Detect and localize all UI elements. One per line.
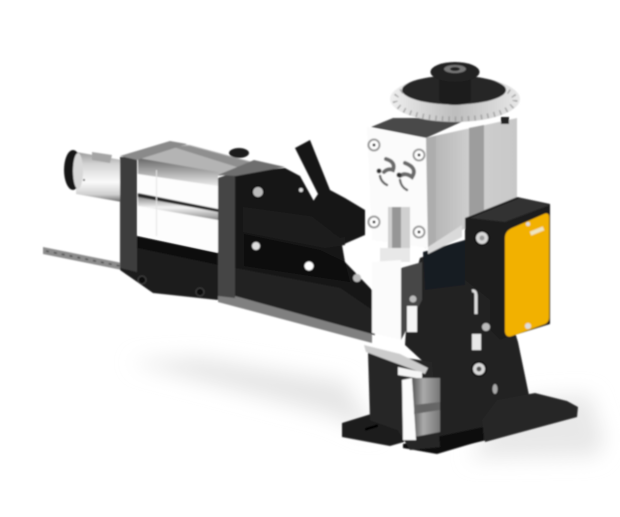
main black slide body: [218, 168, 375, 343]
second end plate: [218, 172, 235, 298]
slot and pins: [407, 291, 490, 350]
top plate: [371, 118, 470, 138]
crimp body black: [405, 225, 529, 452]
base plate: [342, 393, 578, 454]
bolts: [251, 186, 361, 282]
wire strip: [43, 247, 122, 270]
cylinder body: [136, 143, 253, 252]
yellow label plate: [505, 213, 549, 336]
white front face: [367, 127, 428, 248]
front end plate: [120, 157, 137, 272]
knob behind body: [229, 148, 249, 158]
white ram block: [372, 260, 422, 340]
lower frame and anvil: [364, 345, 440, 450]
lower slide block: [120, 236, 218, 300]
angled air fitting: [295, 140, 365, 238]
dial knob: [430, 62, 480, 105]
bolts on plate: [472, 231, 498, 394]
grey side of housing: [425, 118, 517, 248]
black back plate: [465, 197, 550, 340]
logo on front face: [376, 159, 414, 190]
adjusting pin: [380, 207, 410, 262]
left feed cylinder: [64, 150, 122, 202]
floor shadow: [130, 358, 604, 458]
dial black disc: [402, 76, 506, 104]
dial ring: [390, 76, 520, 124]
